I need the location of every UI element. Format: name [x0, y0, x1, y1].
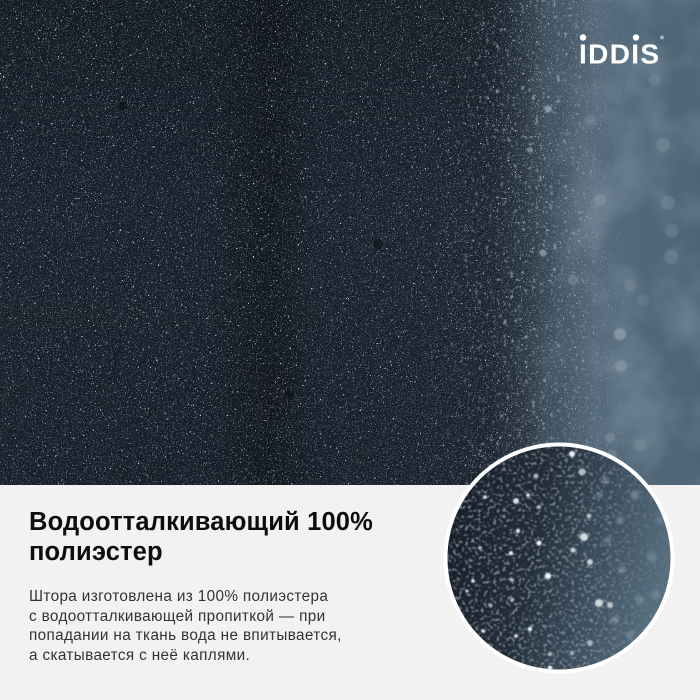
heading: Водоотталкивающий 100%: [29, 508, 373, 536]
body text: с водоотталкивающей пропиткой — при: [29, 608, 326, 625]
logo: IDDIS: IDDIS: [579, 38, 660, 70]
heading: полиэстер: [29, 538, 163, 566]
panel: fabric photo: [0, 0, 700, 485]
body text: Штора изготовлена из 100% полиэстера: [29, 588, 328, 605]
body text: а скатывается с неё каплями.: [29, 647, 250, 664]
body text: [29, 588, 342, 664]
body text: попадании на ткань вода не впитывается,: [29, 627, 342, 644]
icon: circular close-up of fabric: [443, 442, 675, 674]
heading: [29, 508, 373, 566]
icon: registered mark: [660, 36, 664, 40]
panel: text background: [0, 485, 700, 700]
